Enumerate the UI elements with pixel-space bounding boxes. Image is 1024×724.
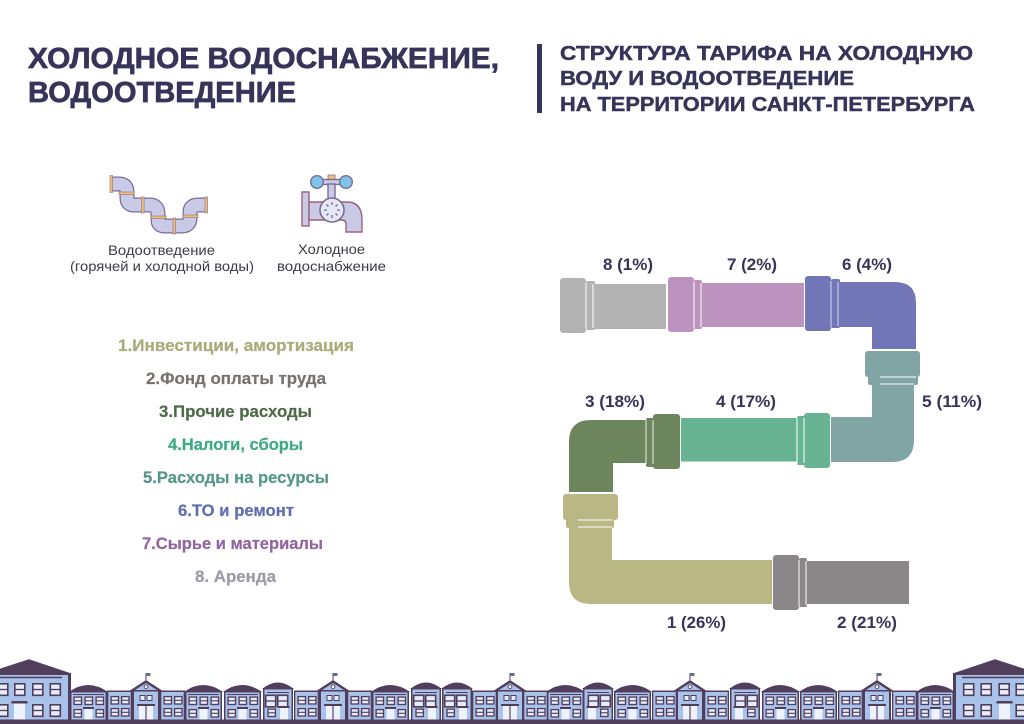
pipe segment 1 xyxy=(563,494,772,604)
pipe percentage labels: 3 (18%) xyxy=(585,393,645,411)
subtitle: НА ТЕРРИТОРИИ САНКТ-ПЕТЕРБУРГА xyxy=(560,93,975,116)
caption: cold water xyxy=(277,241,386,274)
legend list: 5.Расходы на ресурсы xyxy=(143,469,329,487)
caption: drainage: Водоотведение xyxy=(108,242,215,258)
pipe percentage labels: 2 (21%) xyxy=(837,614,897,632)
legend list xyxy=(118,337,354,586)
title: ВОДООТВЕДЕНИЕ xyxy=(28,77,296,109)
caption: cold water: Холодное xyxy=(298,241,365,257)
street of buildings xyxy=(0,659,1024,724)
caption: cold water: водоснабжение xyxy=(277,258,386,274)
pipe segment 3 xyxy=(569,414,680,492)
subtitle: ВОДУ И ВОДООТВЕДЕНИЕ xyxy=(560,67,854,90)
icon: water tap xyxy=(302,175,362,232)
legend list: 7.Сырье и материалы xyxy=(142,535,323,553)
pipe percentage labels: 5 (11%) xyxy=(922,393,982,411)
pipe percentage labels xyxy=(585,256,982,632)
pipe segment 6 xyxy=(805,276,916,349)
caption: drainage: (горячей и холодной воды) xyxy=(70,258,254,274)
caption: drainage xyxy=(70,242,254,274)
subtitle: СТРУКТУРА ТАРИФА НА ХОЛОДНУЮ xyxy=(560,42,973,65)
title xyxy=(28,43,499,109)
legend list: 2.Фонд оплаты труда xyxy=(146,370,327,388)
subtitle xyxy=(560,42,975,116)
pipe segment 8 xyxy=(560,278,666,333)
pipe percentage labels: 8 (1%) xyxy=(603,256,653,274)
legend list: 4.Налоги, сборы xyxy=(168,436,303,454)
pipe percentage labels: 1 (26%) xyxy=(667,614,726,632)
title: ХОЛОДНОЕ ВОДОСНАБЖЕНИЕ, xyxy=(28,43,499,75)
pipe segment 7 xyxy=(668,277,804,332)
pipe segment 4 xyxy=(681,413,830,468)
pipe segment 2 xyxy=(773,555,909,610)
heading accent bar xyxy=(537,44,542,113)
pipe percentage labels: 6 (4%) xyxy=(842,256,892,274)
pipe chart xyxy=(560,276,920,610)
legend list: 6.ТО и ремонт xyxy=(178,502,294,520)
pipe segment 5 xyxy=(831,351,920,462)
legend list: 3.Прочие расходы xyxy=(159,403,312,421)
legend list: 1.Инвестиции, амортизация xyxy=(118,337,354,355)
icon: drainage pipes xyxy=(110,176,208,234)
pipe percentage labels: 7 (2%) xyxy=(727,256,777,274)
pipe percentage labels: 4 (17%) xyxy=(716,393,776,411)
legend list: 8. Аренда xyxy=(195,568,277,586)
